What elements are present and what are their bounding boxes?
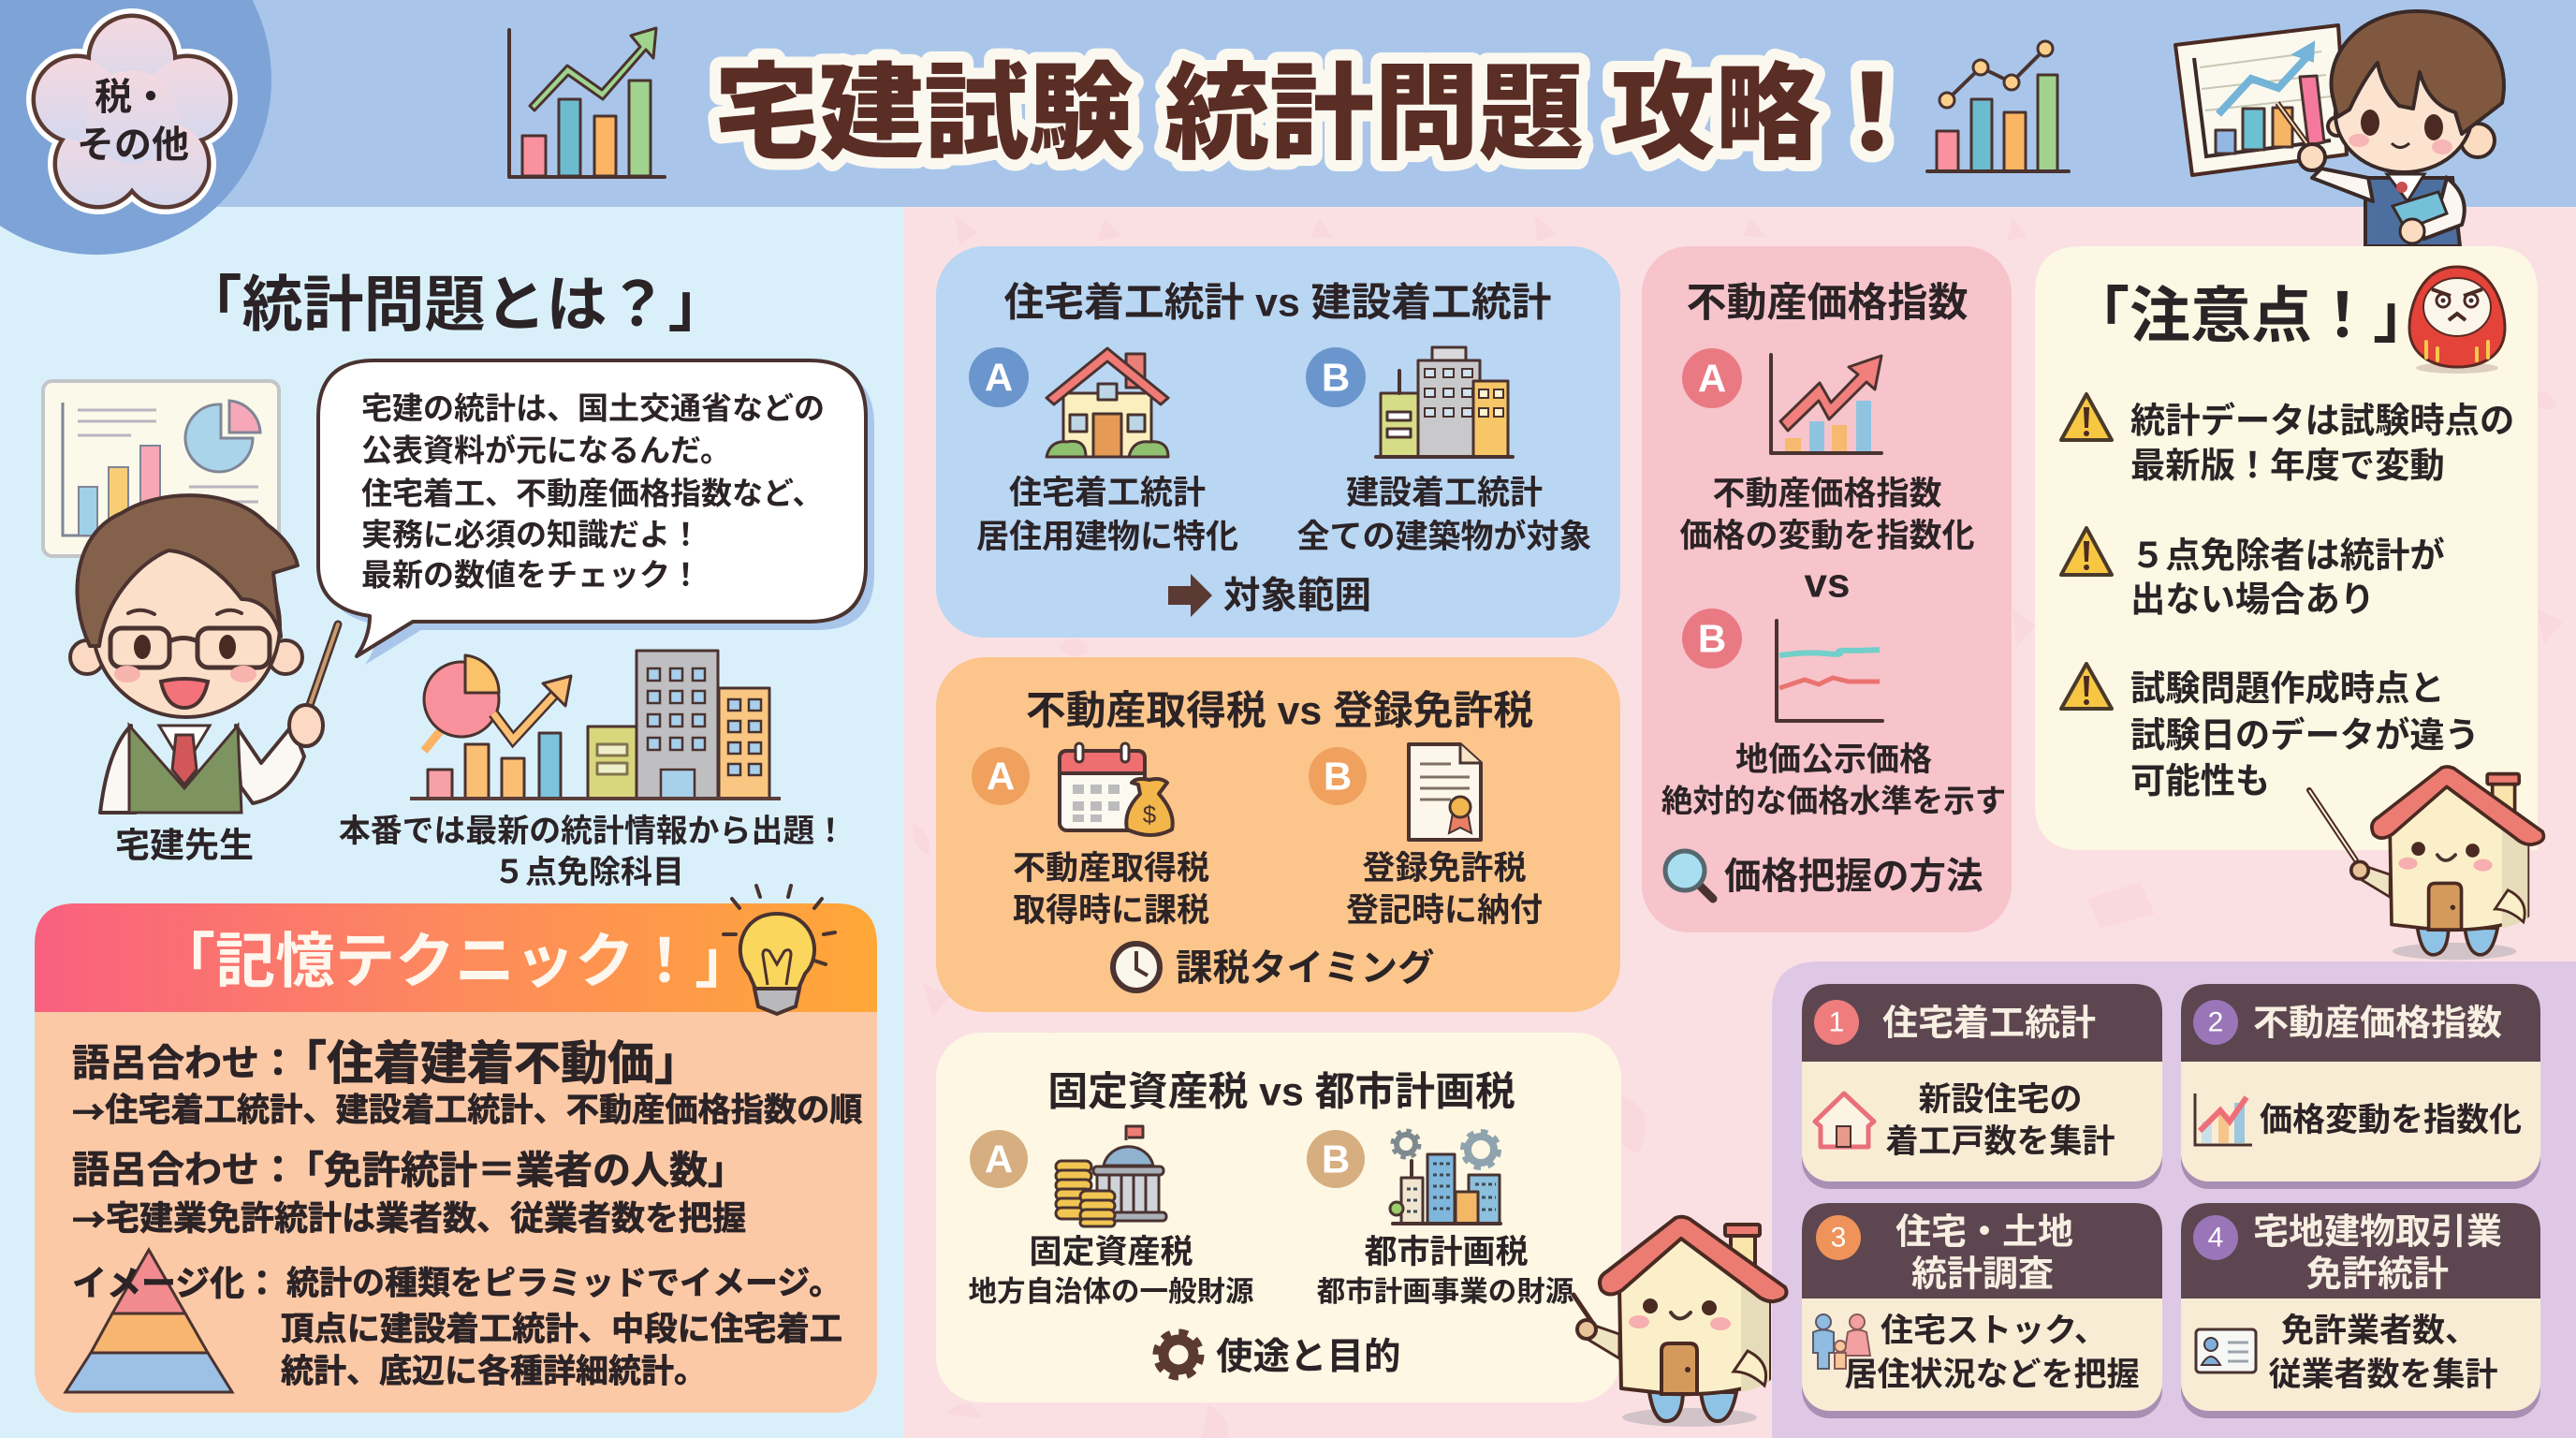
- badge A: [970, 1130, 1028, 1188]
- label: use and purpose: 使途と目的: [1216, 1337, 1400, 1378]
- caption: five point exemption: ５点免除科目: [493, 855, 684, 890]
- warning 2: ５点免除者は統計が: [2130, 536, 2445, 575]
- background: right pale pink: [903, 207, 2576, 1438]
- icon: calendar and money bag: [1060, 743, 1173, 835]
- text A: [1013, 850, 1209, 929]
- text B: 登録免許税: [1362, 850, 1527, 887]
- mnemonic 1: 「住着建着不動価」: [280, 1037, 701, 1090]
- label: tax timing: 課税タイミング: [1176, 947, 1434, 989]
- panel: housing vs construction starts: [936, 246, 1620, 638]
- text B: 全ての建築物が対象: [1296, 519, 1592, 555]
- header band: [0, 0, 2576, 207]
- badge A: A: [987, 755, 1015, 798]
- card 3: 3: [1831, 1223, 1846, 1253]
- text B: [1346, 850, 1543, 929]
- badge: cherry blossom category label: その他: [77, 125, 189, 166]
- badge: cherry blossom category label: [36, 18, 228, 205]
- warning 1: 統計データは試験時点の: [2130, 401, 2514, 440]
- warning 3: 試験日のデータが違う: [2130, 715, 2480, 755]
- icon: clock: [1113, 944, 1160, 990]
- icon: pyramid: [66, 1250, 232, 1392]
- text B: 地価公示価格: [1735, 741, 1932, 778]
- panel: memory technique: [35, 886, 877, 1413]
- card 3: 統計調査: [1911, 1255, 2054, 1294]
- badge A: A: [1698, 356, 1726, 401]
- text A: 住宅着工統計: [1009, 475, 1206, 511]
- card 4: 免許業者数、: [2281, 1313, 2478, 1349]
- character: house mascot with pointer top right: [2309, 767, 2543, 960]
- card 4: 従業者数を集計: [2268, 1357, 2498, 1393]
- title: 統計問題: [1164, 54, 1584, 172]
- card 1: 新設住宅の: [1918, 1081, 2083, 1118]
- text B: 都市計画税: [1364, 1234, 1529, 1270]
- character: teacher: [70, 495, 338, 813]
- panel heading: 不動産価格指数: [1687, 281, 1968, 326]
- mnemonic 2: 「免許統計＝業者の人数」: [285, 1149, 746, 1192]
- warning 1: 最新版！年度で変動: [2130, 446, 2445, 485]
- badge A: [1682, 348, 1742, 408]
- speech bubble: 住宅着工、不動産価格指数など、: [361, 476, 823, 511]
- icon: rising chart: [1771, 355, 1881, 453]
- card 3: 住宅・土地: [1895, 1213, 2073, 1253]
- icon: daruma: [2409, 267, 2505, 374]
- mnemonic 1: [72, 1037, 863, 1135]
- card 4: 免許統計: [2306, 1255, 2449, 1294]
- badge A: [969, 347, 1029, 407]
- vs label: vs: [1805, 560, 1850, 607]
- icon: certificate document: [1409, 744, 1481, 840]
- badge B: B: [1324, 755, 1352, 798]
- card 2: 不動産価格指数: [2253, 1004, 2502, 1043]
- illustration: charts and buildings: [410, 651, 781, 799]
- image technique text: 頂点に建設着工統計、中段に住宅着工: [281, 1311, 842, 1348]
- text A: 不動産価格指数: [1712, 476, 1942, 512]
- badge A: A: [985, 1137, 1013, 1181]
- text A: 価格の変動を指数化: [1679, 518, 1975, 554]
- icon: line chart: [1777, 621, 1882, 721]
- warning 2: [2061, 528, 2445, 619]
- card 2: [2181, 984, 2540, 1189]
- panel: cautions: [2035, 246, 2538, 850]
- icon: arrow: [1168, 574, 1212, 617]
- heading: what are statistics questions: 「統計問題とは？」: [181, 270, 729, 339]
- memory header band: [35, 903, 877, 1012]
- card 4: 宅地建物取引業: [2253, 1213, 2502, 1253]
- text A: [1679, 476, 1975, 554]
- panel: acquisition vs registration tax: [936, 657, 1620, 1012]
- icon: gear: [1158, 1334, 1199, 1375]
- warning 1: [2061, 394, 2514, 485]
- badge A: [972, 747, 1030, 805]
- icon: government building and coins: [1056, 1126, 1166, 1226]
- mnemonic 2: 語呂合わせ：: [72, 1150, 297, 1191]
- memory heading: 「記憶テクニック！」: [155, 928, 754, 995]
- badge B: B: [1322, 356, 1350, 399]
- card 1: 着工戸数を集計: [1885, 1123, 2115, 1160]
- text B: [1317, 1234, 1573, 1308]
- card 1: 住宅着工統計: [1882, 1004, 2096, 1043]
- icon: report board behind teacher: [43, 381, 279, 556]
- icon: light bulb: [724, 886, 835, 1014]
- text A: 不動産取得税: [1013, 850, 1209, 887]
- label: scope: 対象範囲: [1223, 575, 1371, 616]
- caption: five point exemption: 本番では最新の統計情報から出題！: [339, 814, 846, 849]
- text A: 固定資産税: [1029, 1234, 1193, 1270]
- mnemonic 2: [72, 1149, 746, 1242]
- badge B: [1307, 1130, 1365, 1188]
- panel: real estate price index: [1642, 246, 2012, 932]
- mnemonic 1: 語呂合わせ：: [72, 1043, 297, 1084]
- text A: [968, 1234, 1254, 1308]
- text B: [1296, 475, 1592, 555]
- icon: buildings: [1376, 347, 1513, 457]
- background: left pale blue: [0, 207, 903, 1438]
- caution heading: 「注意点！」: [2069, 281, 2434, 350]
- text A: 取得時に課税: [1013, 892, 1209, 929]
- icon: calendar and money bag: $: [1143, 800, 1157, 829]
- icon: house: [1046, 348, 1168, 457]
- comparison heading: 住宅着工統計 vs 建設着工統計: [1004, 281, 1551, 326]
- card 2: 価格変動を指数化: [2260, 1102, 2522, 1138]
- text B: 絶対的な価格水準を示す: [1661, 785, 2006, 819]
- card 4: 4: [2208, 1223, 2223, 1253]
- text B: 都市計画事業の財源: [1317, 1276, 1573, 1308]
- image technique text: イメージ化：: [72, 1264, 279, 1303]
- warning 2: 出ない場合あり: [2130, 580, 2375, 619]
- caption: five point exemption: [339, 814, 846, 890]
- comparison heading: 固定資産税 vs 都市計画税: [1047, 1069, 1515, 1114]
- label: price method: 価格把握の方法: [1724, 856, 1983, 897]
- text B: 建設着工統計: [1346, 475, 1543, 511]
- icon: magnifier: [1665, 851, 1713, 899]
- panel: purple statistics summary: [1772, 961, 2576, 1438]
- icon: header rising chart left: [509, 28, 665, 177]
- badge B: B: [1322, 1137, 1350, 1181]
- badge: cherry blossom category label: 税・: [95, 77, 169, 118]
- text A: 地方自治体の一般財源: [968, 1276, 1254, 1308]
- image technique text: [72, 1264, 842, 1389]
- card 4: [2181, 1203, 2540, 1418]
- image technique text: 統計、底辺に各種詳細統計。: [281, 1354, 707, 1389]
- icon: header chart right: [1927, 41, 2069, 171]
- title: 攻略！: [1610, 54, 1925, 172]
- badge B: [1309, 747, 1367, 805]
- speech bubble: 公表資料が元になるんだ。: [361, 433, 731, 468]
- warning 3: [2061, 664, 2480, 800]
- speech bubble: 実務に必須の知識だよ！: [361, 517, 701, 552]
- warning 3: 試験問題作成時点と: [2130, 668, 2445, 708]
- comparison heading: 不動産取得税 vs 登録免許税: [1026, 689, 1533, 734]
- badge A: A: [985, 356, 1013, 399]
- text B: [1661, 741, 2006, 819]
- speech bubble: 宅建の統計は、国土交通省などの: [361, 391, 825, 425]
- text A: [976, 475, 1238, 555]
- speech bubble: [318, 360, 874, 665]
- text A: 居住用建物に特化: [976, 519, 1238, 555]
- image technique text: 統計の種類をピラミッドでイメージ。: [286, 1266, 842, 1301]
- badge B: [1306, 347, 1366, 407]
- corner circle: [0, 0, 271, 255]
- card 1: 1: [1829, 1007, 1844, 1037]
- mnemonic 2: →宅建業免許統計は業者数、従業者数を把握: [72, 1194, 746, 1242]
- character: house mascot with pointer bottom: [1573, 1217, 1786, 1427]
- label: teacher name: 宅建先生: [115, 826, 254, 865]
- badge B: [1682, 609, 1742, 668]
- mnemonic 1: →住宅着工統計、建設着工統計、不動産価格指数の順: [72, 1086, 863, 1135]
- speech bubble: 最新の数値をチェック！: [361, 558, 701, 592]
- character: boy with chart board: [2175, 11, 2504, 246]
- card 2: 2: [2208, 1007, 2223, 1037]
- warning 3: 可能性も: [2130, 761, 2270, 800]
- panel: fixed asset vs city planning tax: [936, 1033, 1621, 1402]
- card 3: 居住状況などを把握: [1844, 1357, 2140, 1393]
- card 3: 住宅ストック、: [1881, 1313, 2107, 1349]
- badge B: B: [1698, 616, 1726, 661]
- icon: city and gears: [1390, 1132, 1500, 1224]
- text B: 登記時に納付: [1346, 892, 1543, 929]
- card 1: [1802, 984, 2162, 1189]
- card 3: [1802, 1203, 2162, 1418]
- title: 宅建試験: [714, 54, 1134, 172]
